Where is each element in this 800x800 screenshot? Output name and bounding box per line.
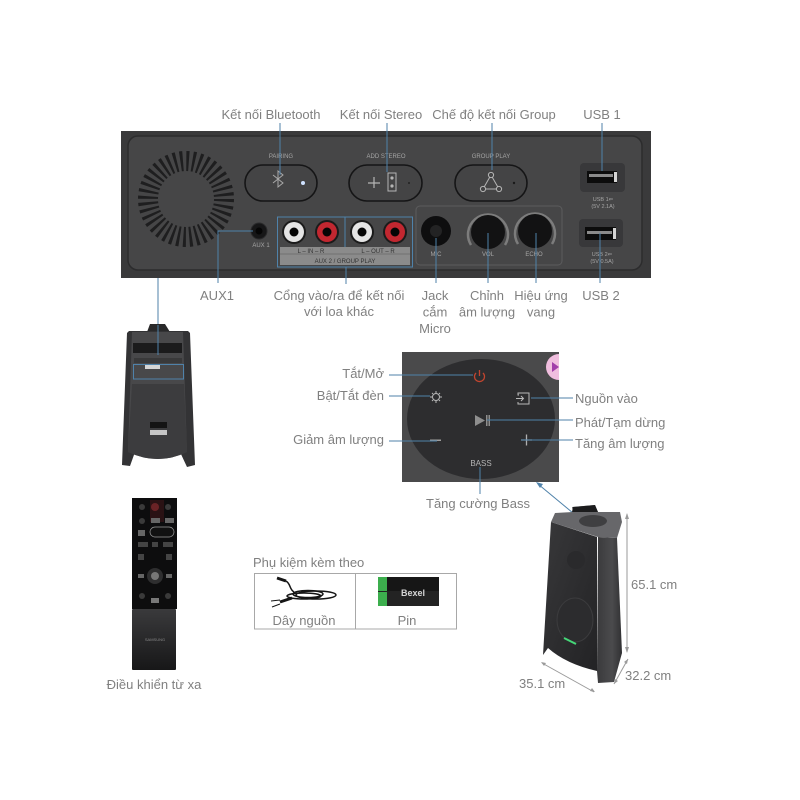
- button: group play: [455, 154, 527, 201]
- callout lines: control pad: [389, 375, 573, 494]
- panel: top control pad: [402, 352, 559, 482]
- controls: mic, volume and echo: MIC: [430, 252, 442, 258]
- port: USB 1: (5V 2.1A): [591, 204, 615, 210]
- label: Cổng vào/ra: với loa khác: [304, 304, 374, 319]
- dimension: width: [541, 662, 595, 692]
- dimension: height: [625, 513, 629, 653]
- icon: speaker grill: [148, 161, 224, 237]
- label: Giảm âm lượng: Giảm âm lượng: [293, 432, 384, 447]
- product: remote control: [132, 498, 177, 670]
- panel: accessories table: [254, 574, 456, 629]
- button: pairing: PAIRING: [269, 154, 293, 160]
- label: Dây nguồn: Dây nguồn: [273, 613, 335, 628]
- label: Nguồn vào: Nguồn vào: [575, 391, 638, 406]
- port: USB 2: (5V 0.5A): [590, 259, 614, 265]
- product: remote control: SAMSUNG: [145, 637, 165, 642]
- icon: power: [474, 370, 485, 382]
- label: Chỉnh âm lượng: Chỉnh: [470, 288, 504, 303]
- port: USB 2: [579, 219, 623, 265]
- label: Tăng âm lượng: Tăng âm lượng: [575, 436, 664, 451]
- button: add stereo: ADD STEREO: [366, 154, 406, 160]
- label: Kết nối Stereo: Kết nối Stereo: [340, 107, 422, 122]
- label: 65.1 cm: 65.1 cm: [631, 577, 677, 592]
- label: Bật/Tắt đèn: Bật/Tắt đèn: [317, 388, 384, 403]
- port: AUX1 jack: AUX 1: [252, 243, 270, 249]
- ports: RCA in and out: [280, 220, 410, 265]
- button: add stereo: [349, 154, 422, 201]
- controls: mic, volume and echo: ECHO: [525, 252, 543, 258]
- icon: power cord: [271, 578, 336, 607]
- dimension: depth: [614, 659, 628, 684]
- label: Điều khiển từ xa: Điều khiển từ xa: [107, 677, 202, 692]
- label: Pin: Pin: [398, 613, 416, 628]
- label: Chỉnh âm lượng: âm lượng: [459, 304, 515, 320]
- icon: plus: [521, 434, 532, 446]
- label: 35.1 cm: 35.1 cm: [519, 676, 565, 691]
- port: AUX1 jack: [251, 223, 270, 249]
- label: 32.2 cm: 32.2 cm: [625, 668, 671, 683]
- heading: accessories: Phụ kiệm kèm theo: [253, 555, 364, 570]
- button: group play: GROUP PLAY: [472, 154, 510, 160]
- ports: RCA in and out: AUX 2 / GROUP PLAY: [315, 259, 375, 265]
- label: USB 2: USB 2: [582, 288, 620, 303]
- label: Jack cắm Micro: Jack: [422, 288, 448, 303]
- icon: batteries: Bexel: [401, 588, 425, 598]
- icon: minus: [430, 440, 441, 441]
- label: Tắt/Mở: Tắt/Mở: [342, 366, 384, 381]
- label: AUX1: AUX1: [200, 288, 234, 303]
- icon: source: [516, 393, 529, 404]
- icon: media badge: [546, 354, 559, 380]
- label: USB 1: USB 1: [583, 107, 621, 122]
- product: small rear speaker: [122, 324, 195, 467]
- callout lines: rear panel: [158, 123, 602, 355]
- label: Cổng vào/ra: Cổng vào/ra để kết nối: [274, 288, 404, 303]
- icon: light: [430, 391, 442, 403]
- ports: RCA in and out: L – OUT – R: [361, 249, 395, 255]
- port: USB 1: USB 1⇐: [593, 197, 614, 203]
- highlight: RCA outline: [278, 217, 412, 267]
- text: BASS: BASS: [470, 459, 492, 468]
- controls: mic, volume and echo: [416, 206, 562, 265]
- icon: batteries: [378, 577, 439, 606]
- panel: rear connection panel: [121, 131, 651, 278]
- arrow: pad to speaker: [536, 482, 573, 513]
- label: Phát/Tạm dừng: Phát/Tạm dừng: [575, 415, 665, 430]
- label: Kết nối Bluetooth: Kết nối Bluetooth: [221, 107, 321, 122]
- label: Hiệu ứng vang: Hiệu ứng: [514, 288, 568, 303]
- label: Chế độ kết nối Group: Chế độ kết nối Group: [432, 107, 556, 122]
- port: USB 2: USB 2⇐: [592, 252, 613, 258]
- button: pairing: [245, 154, 317, 201]
- port: USB 1: [580, 163, 625, 210]
- label: Hiệu ứng vang: vang: [527, 304, 555, 320]
- label: Jack cắm Micro: Micro: [419, 321, 451, 336]
- label: Tăng cường Bass: Tăng cường Bass: [426, 496, 530, 511]
- ports: RCA in and out: L – IN – R: [298, 249, 325, 255]
- product: tower speaker: [543, 505, 622, 683]
- controls: mic, volume and echo: VOL: [482, 252, 495, 258]
- label: Jack cắm Micro: cắm: [423, 304, 447, 320]
- icon: play pause: [475, 415, 490, 426]
